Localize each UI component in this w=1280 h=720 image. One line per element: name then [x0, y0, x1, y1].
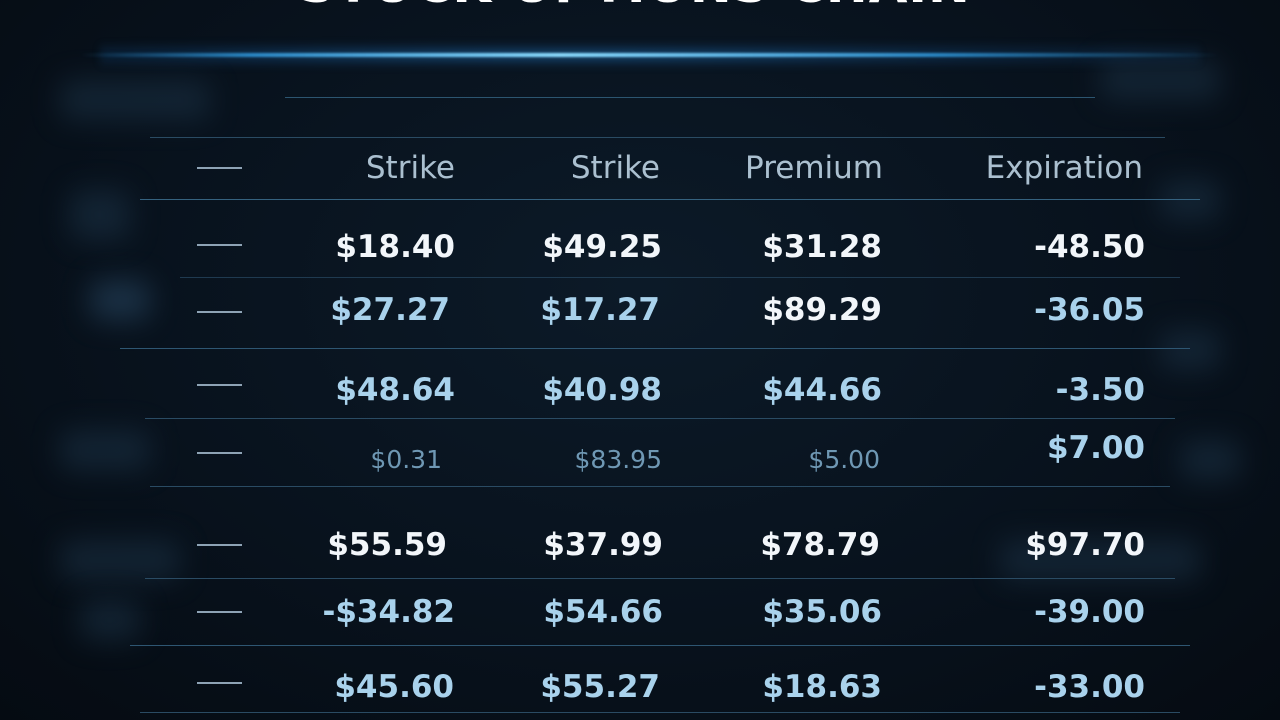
header row: [197, 150, 1143, 186]
row 2: $17.27: [540, 292, 660, 328]
row 1: -48.50: [1034, 229, 1145, 265]
row 5: $37.99: [543, 527, 663, 563]
row 3: $48.64: [335, 372, 455, 408]
row 2: $89.29: [762, 292, 882, 328]
row 4: $83.95: [575, 445, 662, 474]
glowing blue divider: [100, 44, 1200, 66]
row 5: $78.79: [760, 527, 880, 563]
header row: Strike: [571, 150, 660, 186]
row 1: $18.40: [335, 229, 455, 265]
row 5: $97.70: [1025, 527, 1145, 563]
row 3: $44.66: [762, 372, 882, 408]
header row: Strike: [366, 150, 455, 186]
header row: Premium: [745, 150, 883, 186]
row 1: [197, 229, 1145, 265]
row 6: $54.66: [543, 594, 663, 630]
row 1: $31.28: [762, 229, 882, 265]
row 6: $35.06: [762, 594, 882, 630]
row 1: $49.25: [542, 229, 662, 265]
row 7: $18.63: [762, 669, 882, 705]
row 2: -36.05: [1034, 292, 1145, 328]
row 3: $40.98: [542, 372, 662, 408]
row 7: -33.00: [1034, 669, 1145, 705]
row 3: -3.50: [1056, 372, 1145, 408]
row 5: $55.59: [327, 527, 447, 563]
row 7: $55.27: [540, 669, 660, 705]
row 2: [197, 292, 1145, 328]
row 6: -$34.82: [322, 594, 455, 630]
row 7: [197, 669, 1145, 705]
row 5: [197, 527, 1145, 563]
row 2: $27.27: [330, 292, 450, 328]
row 7: $45.60: [334, 669, 454, 705]
row 4: $7.00: [1047, 430, 1145, 466]
row 4: $5.00: [808, 445, 880, 474]
row 4: [197, 430, 1145, 474]
row 3: [197, 372, 1145, 408]
row 4: $0.31: [370, 445, 442, 474]
row 6: [197, 594, 1145, 630]
row 6: -39.00: [1034, 594, 1145, 630]
header row: Expiration: [986, 150, 1143, 186]
